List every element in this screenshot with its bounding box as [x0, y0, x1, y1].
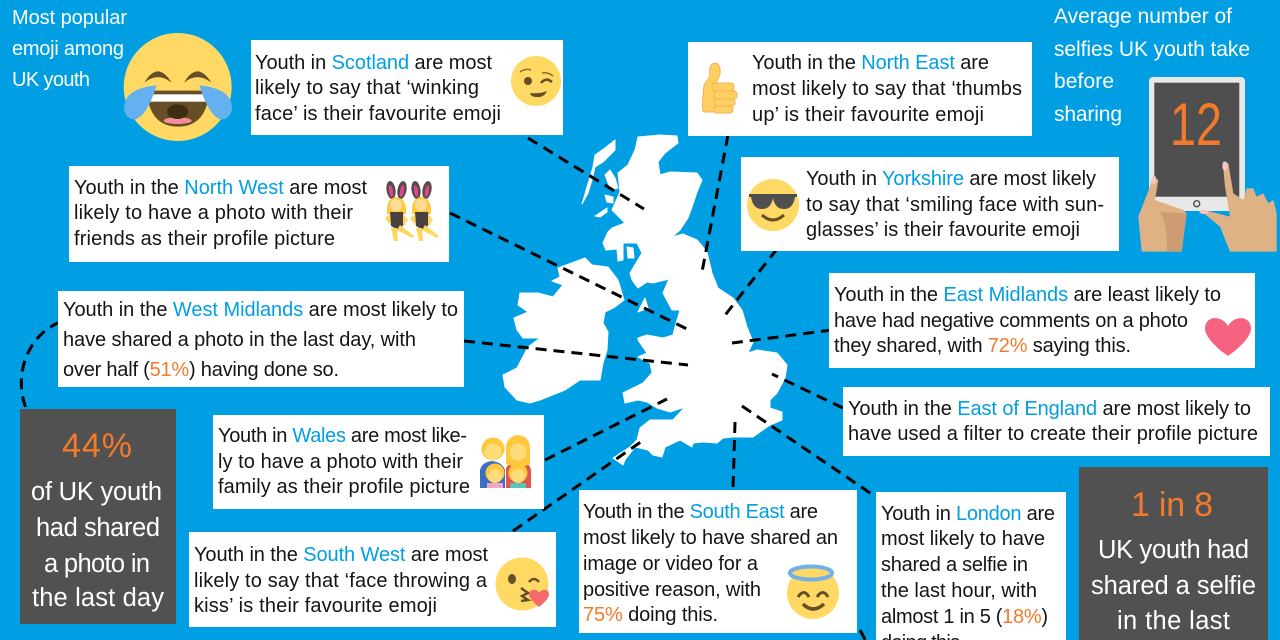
panel: 1 in 8 statistic: UK youth had: [1098, 536, 1249, 564]
panel: West Midlands: have shared a photo in the last day, with: [63, 329, 416, 351]
heading: most popular emoji: UK youth: [12, 69, 90, 91]
panel: 44% statistic: the last day: [32, 584, 164, 612]
panel: London: most likely to have: [881, 528, 1045, 550]
panel: 44% statistic: had shared: [36, 514, 160, 542]
panel: South East: image or video for a: [583, 553, 759, 575]
panel: Wales: ly to have a photo with their: [218, 451, 463, 473]
panel: South West: [189, 532, 556, 627]
panel: East Midlands: have had negative comments on a photo: [834, 310, 1188, 332]
panel: West Midlands: [58, 291, 464, 387]
panel: South West: likely to say that ‘face throwing a: [194, 570, 488, 592]
icon: family: [480, 435, 531, 488]
panel: North West: Youth in the North West are most: [74, 177, 367, 199]
icon: winking face: [511, 56, 561, 106]
heading: average number of selfies: [1054, 5, 1250, 126]
panel: Wales: [213, 415, 544, 509]
panel: 44% statistic: of UK youth: [31, 478, 162, 506]
icon: heart: [1205, 318, 1251, 356]
panel: West Midlands: Youth in the West Midlands are most likely to: [63, 299, 458, 321]
panel: East of England: Youth in the East of England are most likely to: [848, 398, 1251, 420]
panel: Wales: family as their profile picture: [218, 476, 470, 498]
icon: face throwing a kiss: [496, 558, 549, 610]
icon: face with tears of joy: [124, 33, 232, 141]
panel: 44% statistic: [20, 409, 176, 624]
heading: most popular emoji: emoji among: [12, 38, 124, 60]
panel: 1 in 8 statistic: shared a selfie: [1091, 572, 1256, 600]
dashed connector lines: [21, 135, 876, 640]
panel: South West: Youth in the South West are most: [194, 544, 488, 566]
heading: most popular emoji: [12, 7, 127, 91]
icon: tablet held in hands showing 12: [1138, 77, 1277, 252]
panel: South East: Youth in the South East are: [583, 501, 818, 523]
panel: North West: likely to have a photo with their: [74, 202, 353, 224]
icon: smiling face with sunglasses: [747, 179, 799, 231]
panel: Scotland: likely to say that ‘winking: [255, 77, 479, 99]
panel: South West: kiss’ is their favourite emoji: [194, 595, 437, 617]
panel: 44% statistic: a photo in: [44, 550, 150, 578]
panel: East of England: have used a filter to create their profile picture: [848, 423, 1258, 445]
heading: average number of selfies: Average number of: [1054, 5, 1232, 28]
map of UK and Ireland: [503, 135, 787, 465]
panel: North East: Youth in the North East are: [752, 52, 989, 74]
panel: East Midlands: they shared, with 72% saying this.: [834, 335, 1131, 357]
panel: Scotland: Youth in Scotland are most: [255, 52, 492, 74]
panel: London: Youth in London are: [881, 503, 1055, 525]
panel: North West: [69, 166, 449, 262]
panel: Scotland: face’ is their favourite emoji: [255, 103, 501, 125]
panel: North West: friends as their profile picture: [74, 228, 335, 250]
panel: London: the last hour, with: [881, 580, 1037, 602]
panel: East Midlands: Youth in the East Midlands are least likely to: [834, 284, 1221, 306]
panel: Scotland: [251, 40, 563, 135]
panel: 1 in 8 statistic: in the last: [1117, 607, 1230, 635]
heading: average number of selfies: before: [1054, 70, 1114, 93]
panel: London: shared a selfie in: [881, 554, 1028, 576]
panel: Yorkshire: Youth in Yorkshire are most likely: [806, 168, 1096, 190]
heading: average number of selfies: sharing: [1054, 103, 1122, 126]
number 12: 12: [1170, 91, 1222, 158]
heading: most popular emoji: Most popular: [12, 7, 127, 29]
panel: South East: 75% doing this.: [583, 604, 718, 626]
panel: Yorkshire: [741, 157, 1119, 251]
panel: South East: most likely to have shared an: [583, 527, 838, 549]
panel: North East: [688, 42, 1032, 136]
panel: West Midlands: over half (51%) having done so.: [63, 359, 339, 381]
panel: London: almost 1 in 5 (18%): [881, 606, 1048, 628]
panel: Yorkshire: to say that ‘smiling face with sun-: [806, 194, 1104, 216]
panel: Wales: Youth in Wales are most like-: [218, 425, 467, 447]
icon: thumbs up: [702, 63, 737, 113]
panel: East Midlands: [829, 273, 1255, 368]
panel: 44% statistic: 44%: [62, 427, 132, 465]
panel: East of England: [843, 387, 1270, 456]
panel: North East: most likely to say that ‘thumbs: [752, 78, 1022, 100]
heading: average number of selfies: selfies UK youth take: [1054, 38, 1250, 61]
panel: South East: [579, 490, 857, 633]
icon: dancers with bunny ears: [385, 180, 439, 241]
panel: Yorkshire: glasses’ is their favourite emoji: [806, 219, 1080, 241]
panel: North East: up’ is their favourite emoji: [752, 104, 984, 126]
icon: smiling face with halo: [787, 566, 839, 619]
panel: 1 in 8 statistic: [1079, 467, 1268, 640]
panel: South East: positive reason, with: [583, 579, 761, 601]
panel: London: [876, 492, 1066, 640]
panel: 1 in 8 statistic: 1 in 8: [1131, 486, 1213, 524]
